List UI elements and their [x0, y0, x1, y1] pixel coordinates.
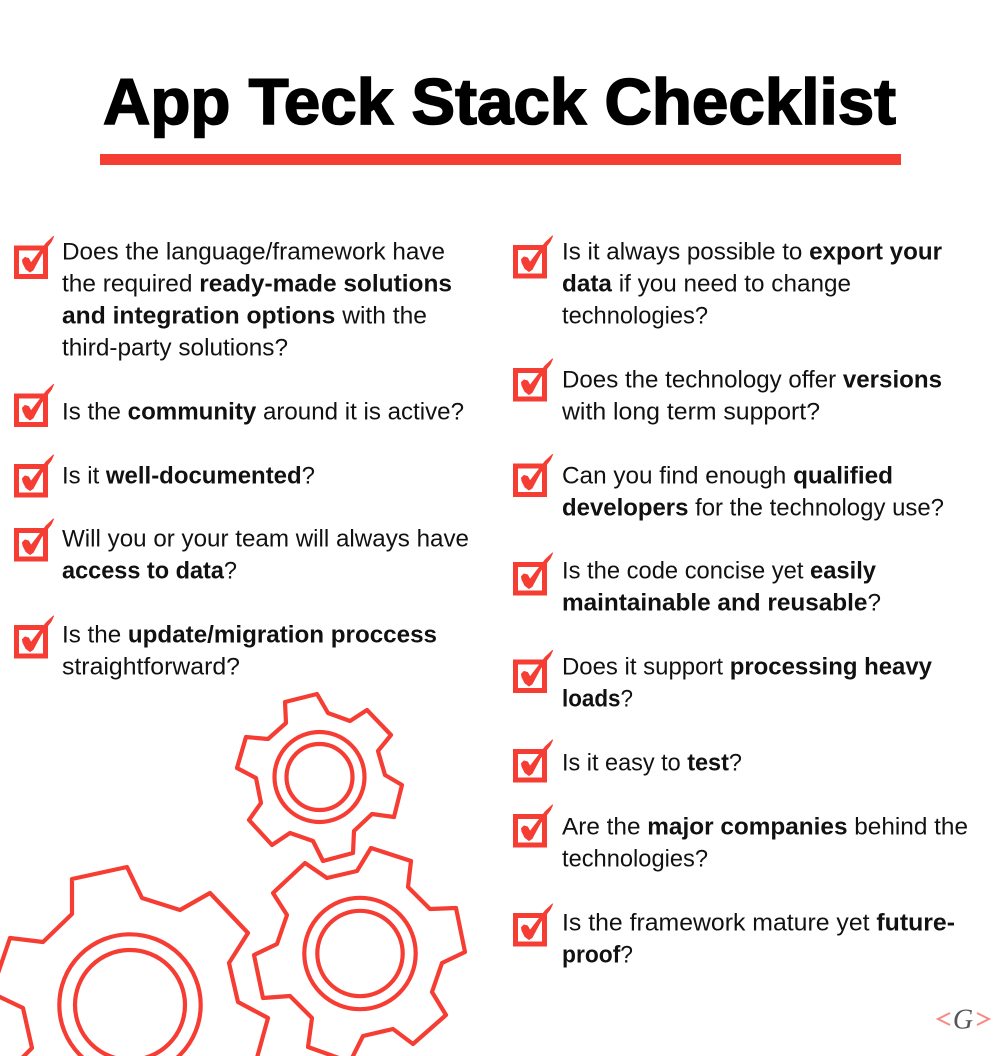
item: update and migration [16, 616, 437, 680]
item: long term support [516, 359, 942, 426]
item: easy to test [516, 740, 742, 780]
icon: large gear [0, 867, 268, 1056]
item: future-proof [516, 904, 955, 968]
title underline [100, 154, 901, 165]
item: easy to test: Is it easy to test? [562, 750, 742, 776]
item: qualified developers: Can you find enough qualified [562, 462, 893, 490]
item: long term support: Does the technology offer versions [562, 366, 942, 394]
item: ready-made solutions: third-party solutions? [62, 334, 288, 362]
icon: gears illustration [0, 694, 465, 1056]
item: future-proof: Is the framework mature yet future- [562, 910, 955, 936]
logo [938, 1004, 989, 1036]
icon: medium gear [254, 848, 465, 1056]
panel: right checklist [516, 236, 968, 968]
item: export data: data if you need to change [562, 270, 851, 298]
item: future-proof: proof? [562, 942, 633, 968]
item: documentation: Is it well-documented? [62, 462, 315, 490]
logo: G [953, 1004, 973, 1036]
item: update and migration: Is the update/migration proccess [62, 622, 437, 648]
item: ready-made solutions [16, 236, 452, 362]
item: access to data [16, 519, 469, 584]
panel: left checklist [16, 236, 469, 680]
item: maintainable code: Is the code concise yet easily [562, 558, 876, 584]
item: qualified developers [516, 454, 944, 522]
item: heavy loads: loads? [562, 686, 633, 712]
title: App Teck Stack Checklist [103, 65, 896, 138]
item: ready-made solutions: and integration options with the [62, 302, 427, 330]
item: community: Is the community around it is active? [62, 398, 464, 426]
item: update and migration: straightforward? [62, 654, 240, 680]
item: documentation [16, 455, 315, 495]
item: maintainable code: maintainable and reusable? [562, 590, 881, 616]
item: access to data: Will you or your team will always have [62, 526, 469, 552]
item: major companies: technologies? [562, 846, 708, 872]
item: access to data: access to data? [62, 558, 237, 584]
item: export data: technologies? [562, 302, 708, 330]
item: long term support: with long term support? [561, 398, 820, 426]
item: qualified developers: developers for the technology use? [562, 494, 944, 522]
item: ready-made solutions: the required ready-made solutions [62, 270, 452, 298]
item: major companies [516, 805, 968, 872]
item: export data [516, 236, 942, 330]
item: heavy loads [516, 650, 932, 712]
item: community [16, 384, 464, 426]
item: heavy loads: Does it support processing heavy [562, 654, 932, 680]
icon: small gear [237, 694, 402, 861]
item: export data: Is it always possible to export your [562, 238, 942, 266]
item: maintainable code [516, 553, 881, 616]
item: major companies: Are the major companies behind the [562, 814, 968, 840]
item: ready-made solutions: Does the language/framework have [62, 238, 445, 266]
